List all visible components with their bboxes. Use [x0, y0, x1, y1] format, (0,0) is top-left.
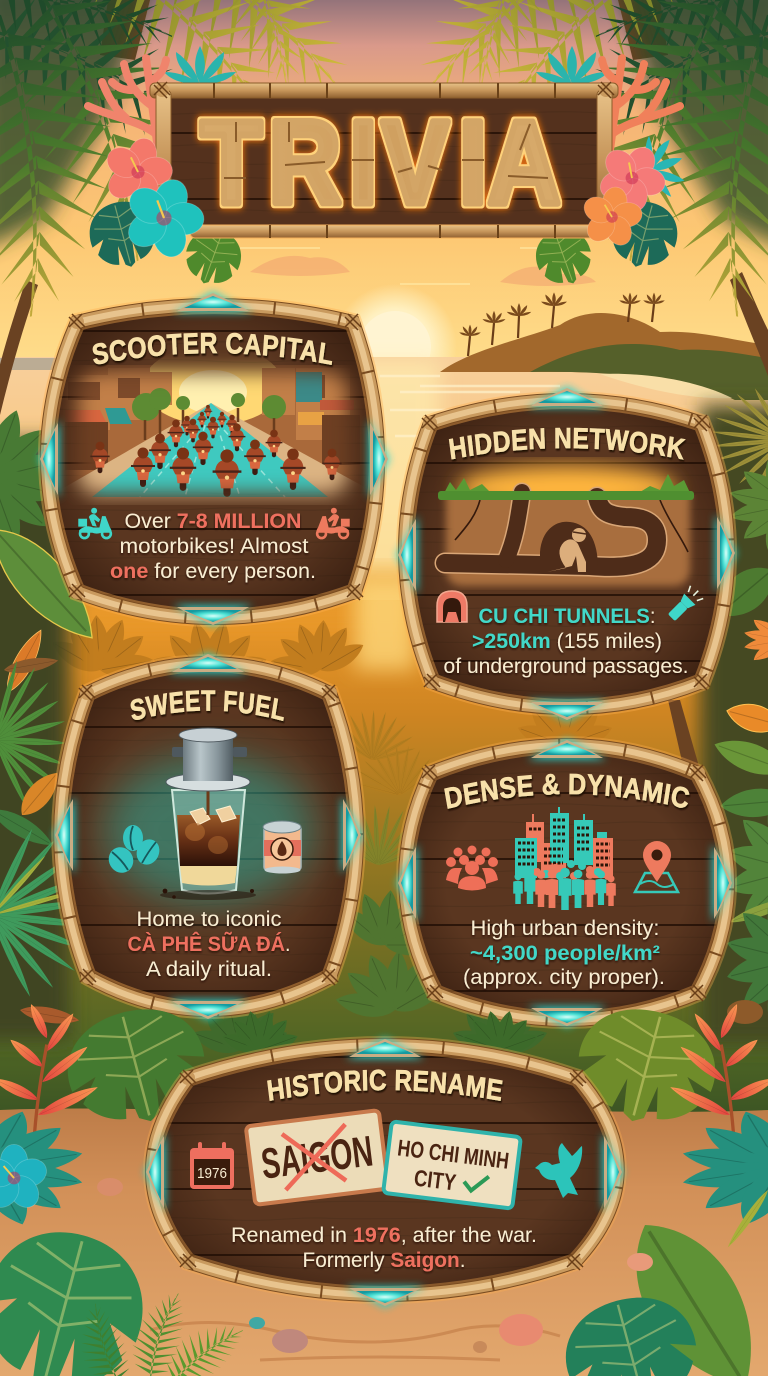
- gems: [53, 652, 363, 1021]
- body text: ~4,300 people/km²: [470, 942, 660, 965]
- title sign: [83, 46, 693, 293]
- icon: teal scooter: [78, 508, 112, 538]
- bamboo joints on title letters: [224, 122, 548, 178]
- Saigon sign: SAIGON: [259, 1127, 376, 1189]
- body text: CÀ PHÊ SỮA ĐÁ.: [128, 932, 290, 956]
- tunnel illustration: [436, 466, 702, 590]
- Saigon sign: [246, 1110, 388, 1205]
- icon: tunnel: [437, 591, 467, 622]
- palm trunks: [0, 0, 768, 770]
- bamboo frame: [60, 663, 357, 1010]
- background: sand: [0, 1109, 768, 1376]
- body text: Over 7-8 MILLION: [124, 510, 302, 533]
- monstera leaves behind bottom panel: [55, 995, 728, 1139]
- flowers right: [574, 128, 693, 254]
- title text: TRIVIA: [201, 97, 560, 229]
- icon: crowd: [446, 846, 498, 890]
- panel: historic rename: [139, 1032, 629, 1313]
- body text: (approx. city proper).: [463, 966, 665, 989]
- body text: A daily ritual.: [146, 958, 272, 981]
- body text: [231, 1224, 537, 1272]
- icon: calendar 1976: 1976: [197, 1165, 227, 1182]
- body text: High urban density:: [470, 917, 660, 940]
- coffee illustration: [160, 728, 256, 900]
- foreground plants right: [553, 1002, 768, 1376]
- panel: hidden network: [391, 381, 742, 727]
- flowers left: [93, 129, 218, 272]
- Ho Chi Minh City sign: HO CHI MINH: [396, 1134, 511, 1174]
- gems: [38, 291, 390, 627]
- bamboo frame: [405, 400, 728, 708]
- crouching figure: [547, 539, 586, 572]
- street illustration: [63, 356, 362, 505]
- icon: red scooter: [316, 508, 350, 538]
- Ho Chi Minh City sign: CITY: [413, 1165, 457, 1196]
- body text: Home to iconic: [136, 908, 282, 931]
- illustration: city and people: [513, 807, 616, 910]
- heading: DENSE & DYNAMIC: [444, 774, 690, 812]
- gems: [144, 1037, 624, 1308]
- body text: [110, 510, 316, 583]
- monstera leaves behind sign: [83, 195, 684, 293]
- body text: CU CHI TUNNELS:: [478, 605, 656, 628]
- body text: motorbikes! Almost: [120, 535, 309, 558]
- bamboo frame: [152, 1045, 618, 1295]
- body text: one for every person.: [110, 560, 316, 583]
- body text: [128, 908, 290, 981]
- panel: dense and dynamic: [392, 733, 738, 1032]
- body text: Formerly Saigon.: [302, 1249, 466, 1272]
- panel: scooter capital: [34, 286, 395, 632]
- palm fronds right: [378, 0, 768, 325]
- icon: coffee beans: [104, 825, 163, 877]
- body text: of underground passages.: [444, 655, 688, 678]
- body text: Renamed in 1976, after the war.: [231, 1224, 537, 1247]
- heading: SCOOTER CAPITAL: [92, 332, 334, 368]
- background: sun and sea: [0, 284, 768, 660]
- palm fronds left: [0, 0, 390, 325]
- body text: [463, 917, 665, 989]
- coral and teal leaves: [88, 46, 680, 150]
- seashells and pebbles: [97, 1178, 653, 1353]
- gems: [396, 386, 737, 722]
- teal glow: [104, 755, 314, 905]
- icon: dove: [535, 1143, 582, 1198]
- bamboo frame: [405, 745, 728, 1020]
- icon: map pin: [635, 841, 678, 892]
- gems: [396, 738, 734, 1028]
- right column foliage: [700, 387, 768, 1045]
- body text: >250km (155 miles): [472, 630, 662, 653]
- icon: calendar 1976: [190, 1142, 234, 1189]
- icon: flashlight: [665, 584, 705, 624]
- background: jungle: [0, 387, 768, 1160]
- background: sunset sky: [0, 0, 768, 380]
- Ho Chi Minh City sign: [383, 1121, 521, 1209]
- icon: condensed milk can: [263, 821, 301, 874]
- body text: [444, 605, 688, 678]
- heading: HISTORIC RENAME: [267, 1069, 504, 1104]
- bamboo frame: [47, 305, 378, 618]
- left column foliage: [0, 406, 110, 1040]
- heading: SWEET FUEL: [130, 690, 286, 724]
- sign board: [150, 82, 618, 238]
- background: headland with palms: [440, 292, 768, 400]
- panel: sweet fuel: [48, 647, 367, 1026]
- heading: HIDDEN NETWORK: [448, 428, 686, 462]
- foreground plants left: [0, 1002, 251, 1376]
